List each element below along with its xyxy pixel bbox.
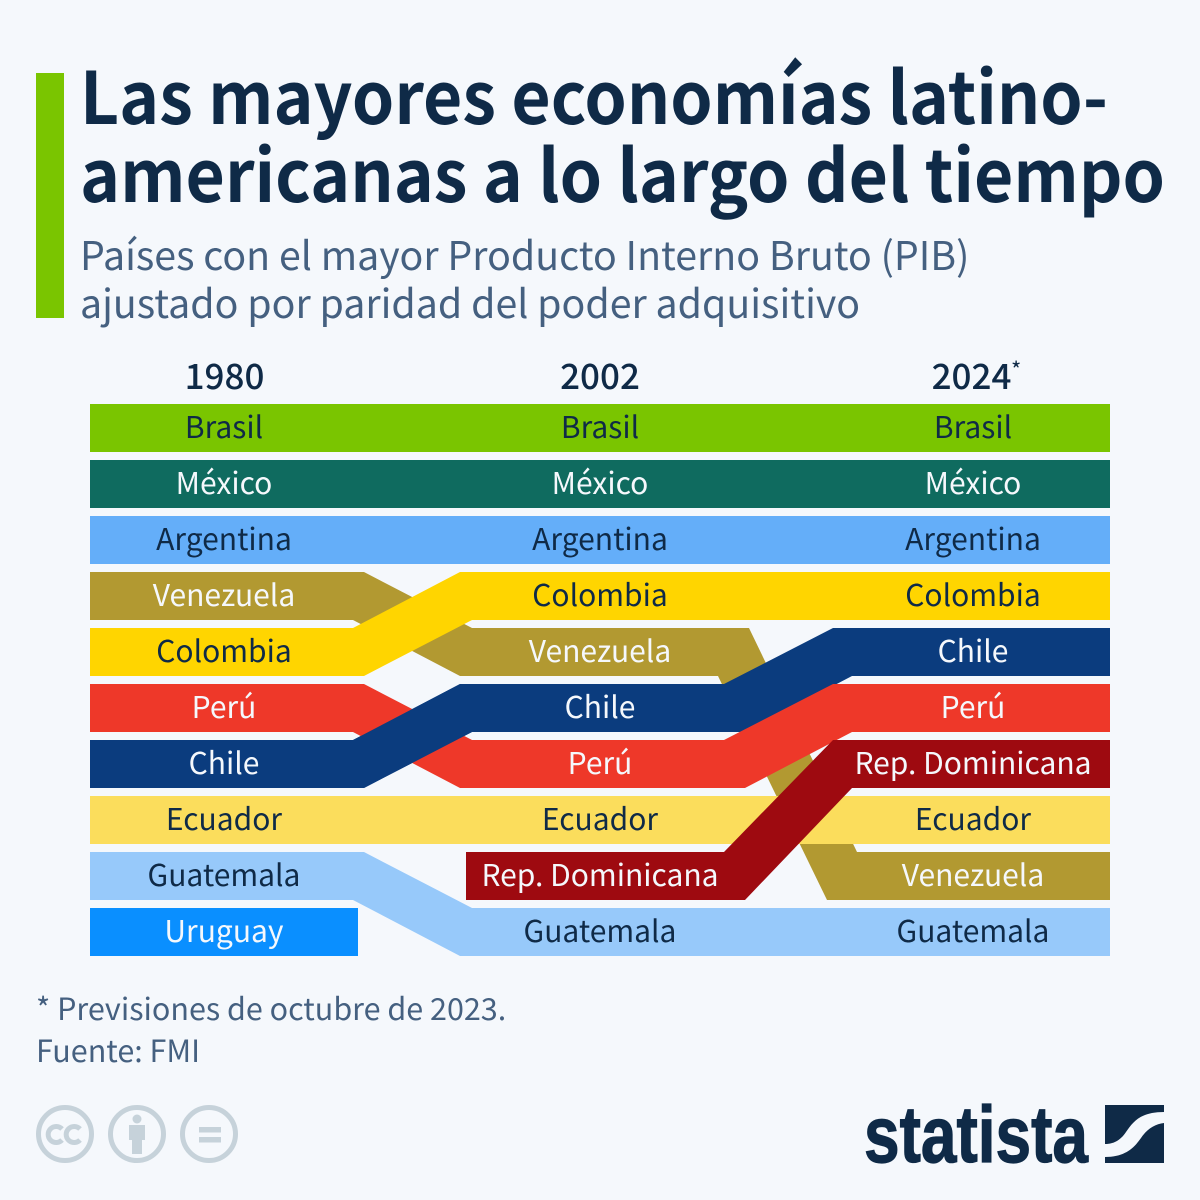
ribbon: Colombia: Colombia xyxy=(156,627,292,671)
ribbon: Chile crossing over Perú: Chile xyxy=(938,627,1008,671)
ribbon: Rep. Dominicana xyxy=(466,739,1110,900)
ribbon: Chile xyxy=(90,628,1110,788)
ribbon: Rep. Dominicana: Rep. Dominicana xyxy=(854,739,1092,783)
column headers: 1980 xyxy=(185,349,264,400)
ribbon: Colombia: Colombia xyxy=(905,571,1041,615)
subtitle: ajustado por paridad del poder adquisitivo xyxy=(80,273,860,330)
ribbon: Chile crossing over Perú: Chile xyxy=(189,739,259,783)
accent bar xyxy=(36,73,64,318)
column headers: * xyxy=(1011,353,1021,385)
ribbon: Uruguay xyxy=(90,907,358,956)
ribbon: Venezuela xyxy=(90,571,1110,900)
ribbon: Perú: Perú xyxy=(941,683,1005,727)
ribbon: Rep. Dominicana: Rep. Dominicana xyxy=(481,851,719,895)
ribbon: Argentina xyxy=(90,515,1110,564)
ribbon: Argentina: Argentina xyxy=(905,515,1041,559)
column headers xyxy=(185,349,1021,400)
column headers: 2024 xyxy=(932,349,1011,400)
ribbon: Perú xyxy=(90,683,1110,788)
ribbon: Argentina: Argentina xyxy=(156,515,292,559)
ribbon: Guatemala: Guatemala xyxy=(897,907,1049,951)
logo: statista mark xyxy=(1105,1105,1164,1163)
ribbon: Ecuador: Ecuador xyxy=(915,795,1031,839)
ribbon: Guatemala: Guatemala xyxy=(148,851,300,895)
subtitle: Países con el mayor Producto Interno Bruto (PIB) xyxy=(80,225,969,282)
ribbon: Uruguay: Uruguay xyxy=(164,907,284,951)
title: Las mayores economías latino- xyxy=(80,40,1108,145)
column headers: 2002 xyxy=(560,349,640,400)
logo: statista wordmark: statista xyxy=(864,1090,1088,1179)
ribbon: Perú: Perú xyxy=(568,739,632,783)
footnote and source: * Previsiones de octubre de 2023. xyxy=(36,985,506,1029)
ribbon: Venezuela: Venezuela xyxy=(529,627,671,671)
footnote and source xyxy=(36,985,506,1071)
ribbon: Brasil xyxy=(90,403,1110,452)
ribbon: México xyxy=(90,459,1110,508)
subtitle xyxy=(80,225,969,330)
title xyxy=(80,40,1165,223)
ribbon: Chile crossing over Perú xyxy=(90,627,1008,788)
icon: CC xyxy=(38,1108,92,1160)
title: americanas a lo largo del tiempo xyxy=(80,118,1165,223)
icon: no derivatives xyxy=(182,1108,236,1160)
icon: attribution xyxy=(110,1108,164,1160)
ribbon: México: México xyxy=(176,459,272,503)
ribbon: Brasil: Brasil xyxy=(561,403,639,447)
ribbon: México: México xyxy=(552,459,648,503)
ribbon: Colombia xyxy=(90,571,1110,676)
ribbon: Ecuador: Ecuador xyxy=(166,795,282,839)
ribbon: Venezuela: Venezuela xyxy=(902,851,1044,895)
ribbon: México: México xyxy=(925,459,1021,503)
ribbon: Guatemala xyxy=(90,851,1110,956)
ribbon: Argentina: Argentina xyxy=(532,515,668,559)
ribbon: Chile crossing over Perú: Chile xyxy=(565,683,635,727)
ribbon: Venezuela: Venezuela xyxy=(153,571,295,615)
ribbon: Perú: Perú xyxy=(192,683,256,727)
footnote and source: Fuente: FMI xyxy=(36,1027,200,1071)
ribbon: Guatemala: Guatemala xyxy=(524,907,676,951)
ribbon: Ecuador xyxy=(90,795,1110,844)
ribbon: Colombia: Colombia xyxy=(532,571,668,615)
ribbon: Ecuador: Ecuador xyxy=(542,795,658,839)
ribbon: Brasil: Brasil xyxy=(185,403,263,447)
ribbon: Brasil: Brasil xyxy=(934,403,1012,447)
